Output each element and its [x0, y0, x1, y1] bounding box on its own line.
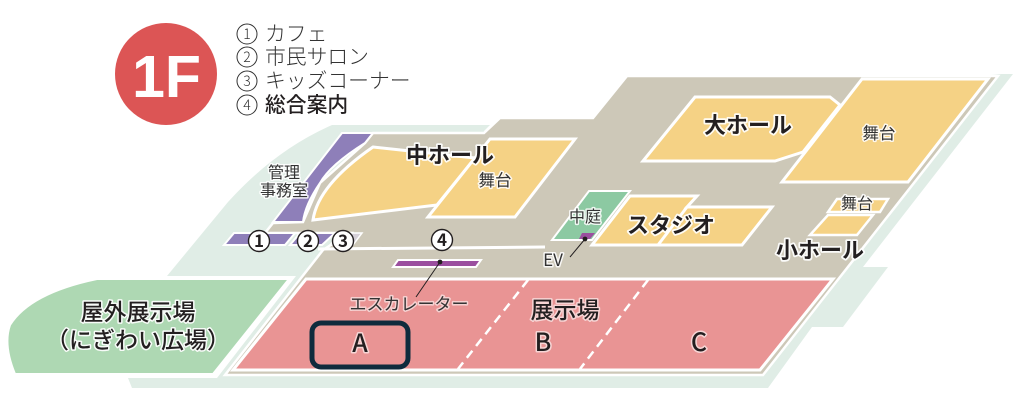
exhibition hall: [233, 279, 833, 370]
floor badge: [115, 23, 217, 125]
label: medium hall: 中ホール: [406, 138, 494, 170]
partition dashed AB: [458, 280, 528, 369]
marker 1: [248, 227, 270, 252]
section A: A: [352, 324, 368, 360]
beige building floor: [225, 76, 998, 375]
escalator label: エスカレーター: [350, 290, 468, 315]
label: outdoor area: （にぎわい広場）: [46, 321, 230, 355]
section C: C: [691, 323, 707, 359]
label: stage: 舞台: [478, 167, 512, 191]
legend item 4: 4: [243, 95, 251, 115]
label: large hall: 大ホール: [704, 108, 792, 140]
legend: [237, 17, 411, 118]
marker 4: [432, 226, 452, 251]
office label: 事務室: [260, 177, 308, 201]
escalator: [393, 260, 481, 297]
office label: [260, 159, 308, 201]
label: outdoor area: 屋外展示場: [80, 293, 196, 327]
label: outdoor area: [46, 293, 230, 355]
small hall: [776, 190, 888, 265]
studio: [592, 196, 772, 245]
marker 3: [332, 227, 354, 252]
floor badge: 1F: [132, 44, 201, 110]
legend item 3: 3: [243, 71, 251, 91]
office label: 管理: [268, 159, 300, 183]
medium hall stage: [428, 139, 575, 217]
legend item 2: 市民サロン: [265, 40, 369, 70]
office: [260, 133, 373, 222]
section A highlight: [312, 323, 408, 367]
section B: B: [535, 323, 551, 359]
corridor strip rooms: [224, 226, 452, 252]
legend item 1: カフェ: [265, 17, 327, 47]
elevator marker: [543, 233, 595, 271]
label: stage: 舞台: [862, 120, 896, 144]
legend item 1: 1: [243, 24, 251, 44]
outdoor exhibition area: [7, 279, 289, 374]
marker 1: 1: [254, 227, 264, 252]
legend item 4: 総合案内: [265, 88, 348, 118]
courtyard: [552, 191, 630, 240]
corridor line: [318, 247, 545, 249]
courtyard label: 中庭: [569, 203, 601, 227]
marker 3: 3: [338, 227, 348, 252]
marker 2: 2: [303, 227, 313, 252]
small hall label: 小ホール: [776, 233, 864, 265]
partition dashed BC: [580, 280, 648, 369]
studio label: スタジオ: [627, 208, 715, 240]
EV label: EV: [543, 246, 563, 271]
small stage label: 舞台: [841, 190, 873, 214]
marker 4: 4: [437, 226, 447, 251]
large hall stage: [782, 79, 988, 182]
legend item 1: [237, 17, 327, 47]
marker 2: [298, 227, 318, 252]
label: exhibition hall: 展示場: [530, 291, 600, 325]
pale green site ground: [128, 74, 1013, 388]
medium hall: [313, 138, 575, 220]
large hall: [643, 79, 988, 182]
legend item 3: キッズコーナー: [265, 64, 411, 94]
legend item 2: 2: [243, 47, 251, 67]
